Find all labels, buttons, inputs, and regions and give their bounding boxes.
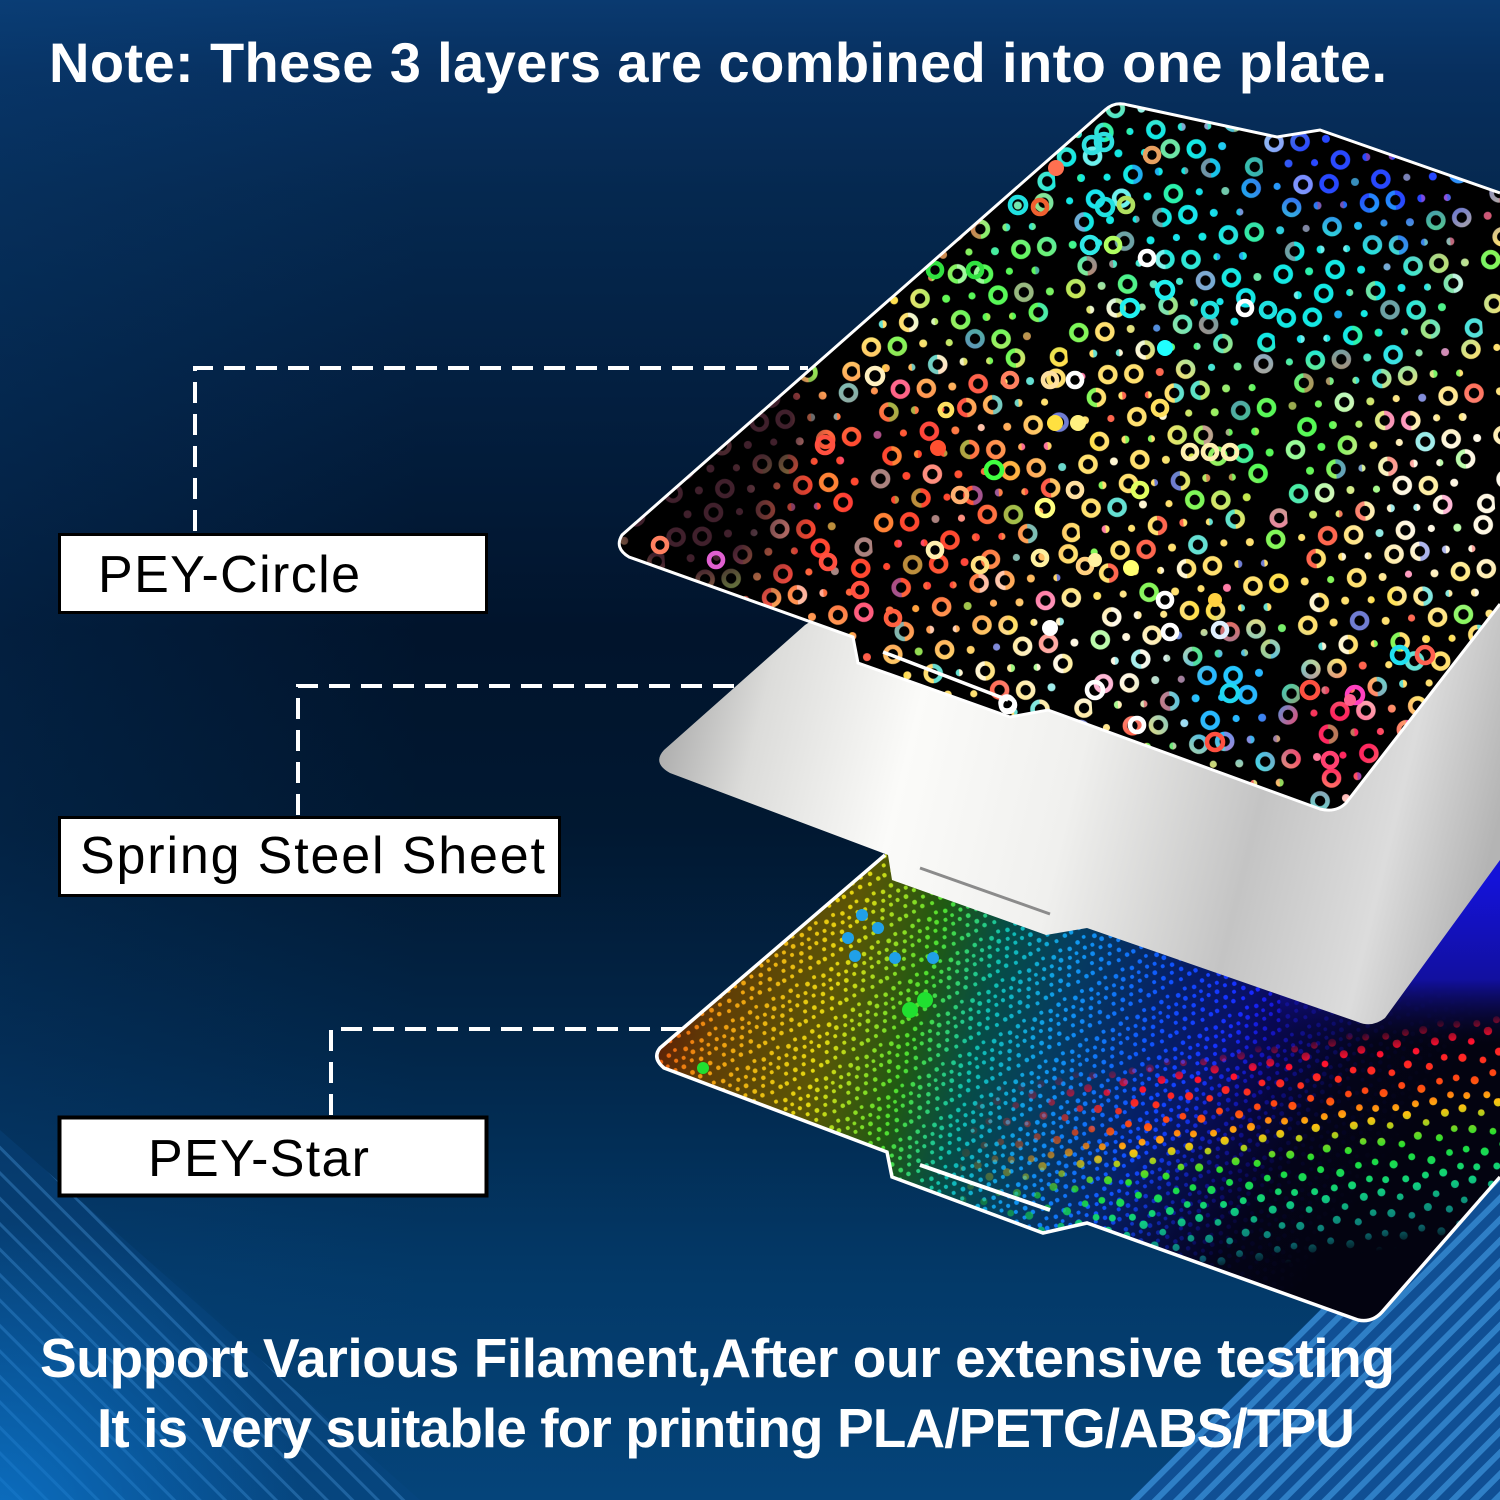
plate: spring steel sheet middle layer (659, 500, 1500, 1024)
label: PEY-Star (60, 1118, 486, 1196)
label: Spring Steel Sheet: Spring Steel Sheet (80, 827, 546, 885)
plate: PEY-Circle top layer (618, 102, 1500, 812)
connector: PEY-Star (331, 1029, 682, 1115)
label: PEY-Circle (60, 534, 486, 612)
label: Spring Steel Sheet (60, 818, 560, 896)
bottom text: Support Various Filament,After our extensive testing (40, 1327, 1395, 1389)
bottom text: It is very suitable for printing PLA/PETG/ABS/TPU (97, 1397, 1355, 1459)
connector: PEY-Circle (195, 368, 808, 531)
hand placed bright rings (653, 134, 1433, 767)
plate: PEY-Star bottom layer (654, 854, 1500, 1322)
title: Note: These 3 layers are combined into one plate. (49, 31, 1387, 94)
ring colour field (620, 105, 1500, 808)
label: PEY-Circle: PEY-Circle (98, 546, 360, 604)
label: PEY-Star: PEY-Star (148, 1130, 369, 1188)
bottom text (40, 1327, 1395, 1459)
connector: Spring Steel Sheet (298, 686, 740, 815)
